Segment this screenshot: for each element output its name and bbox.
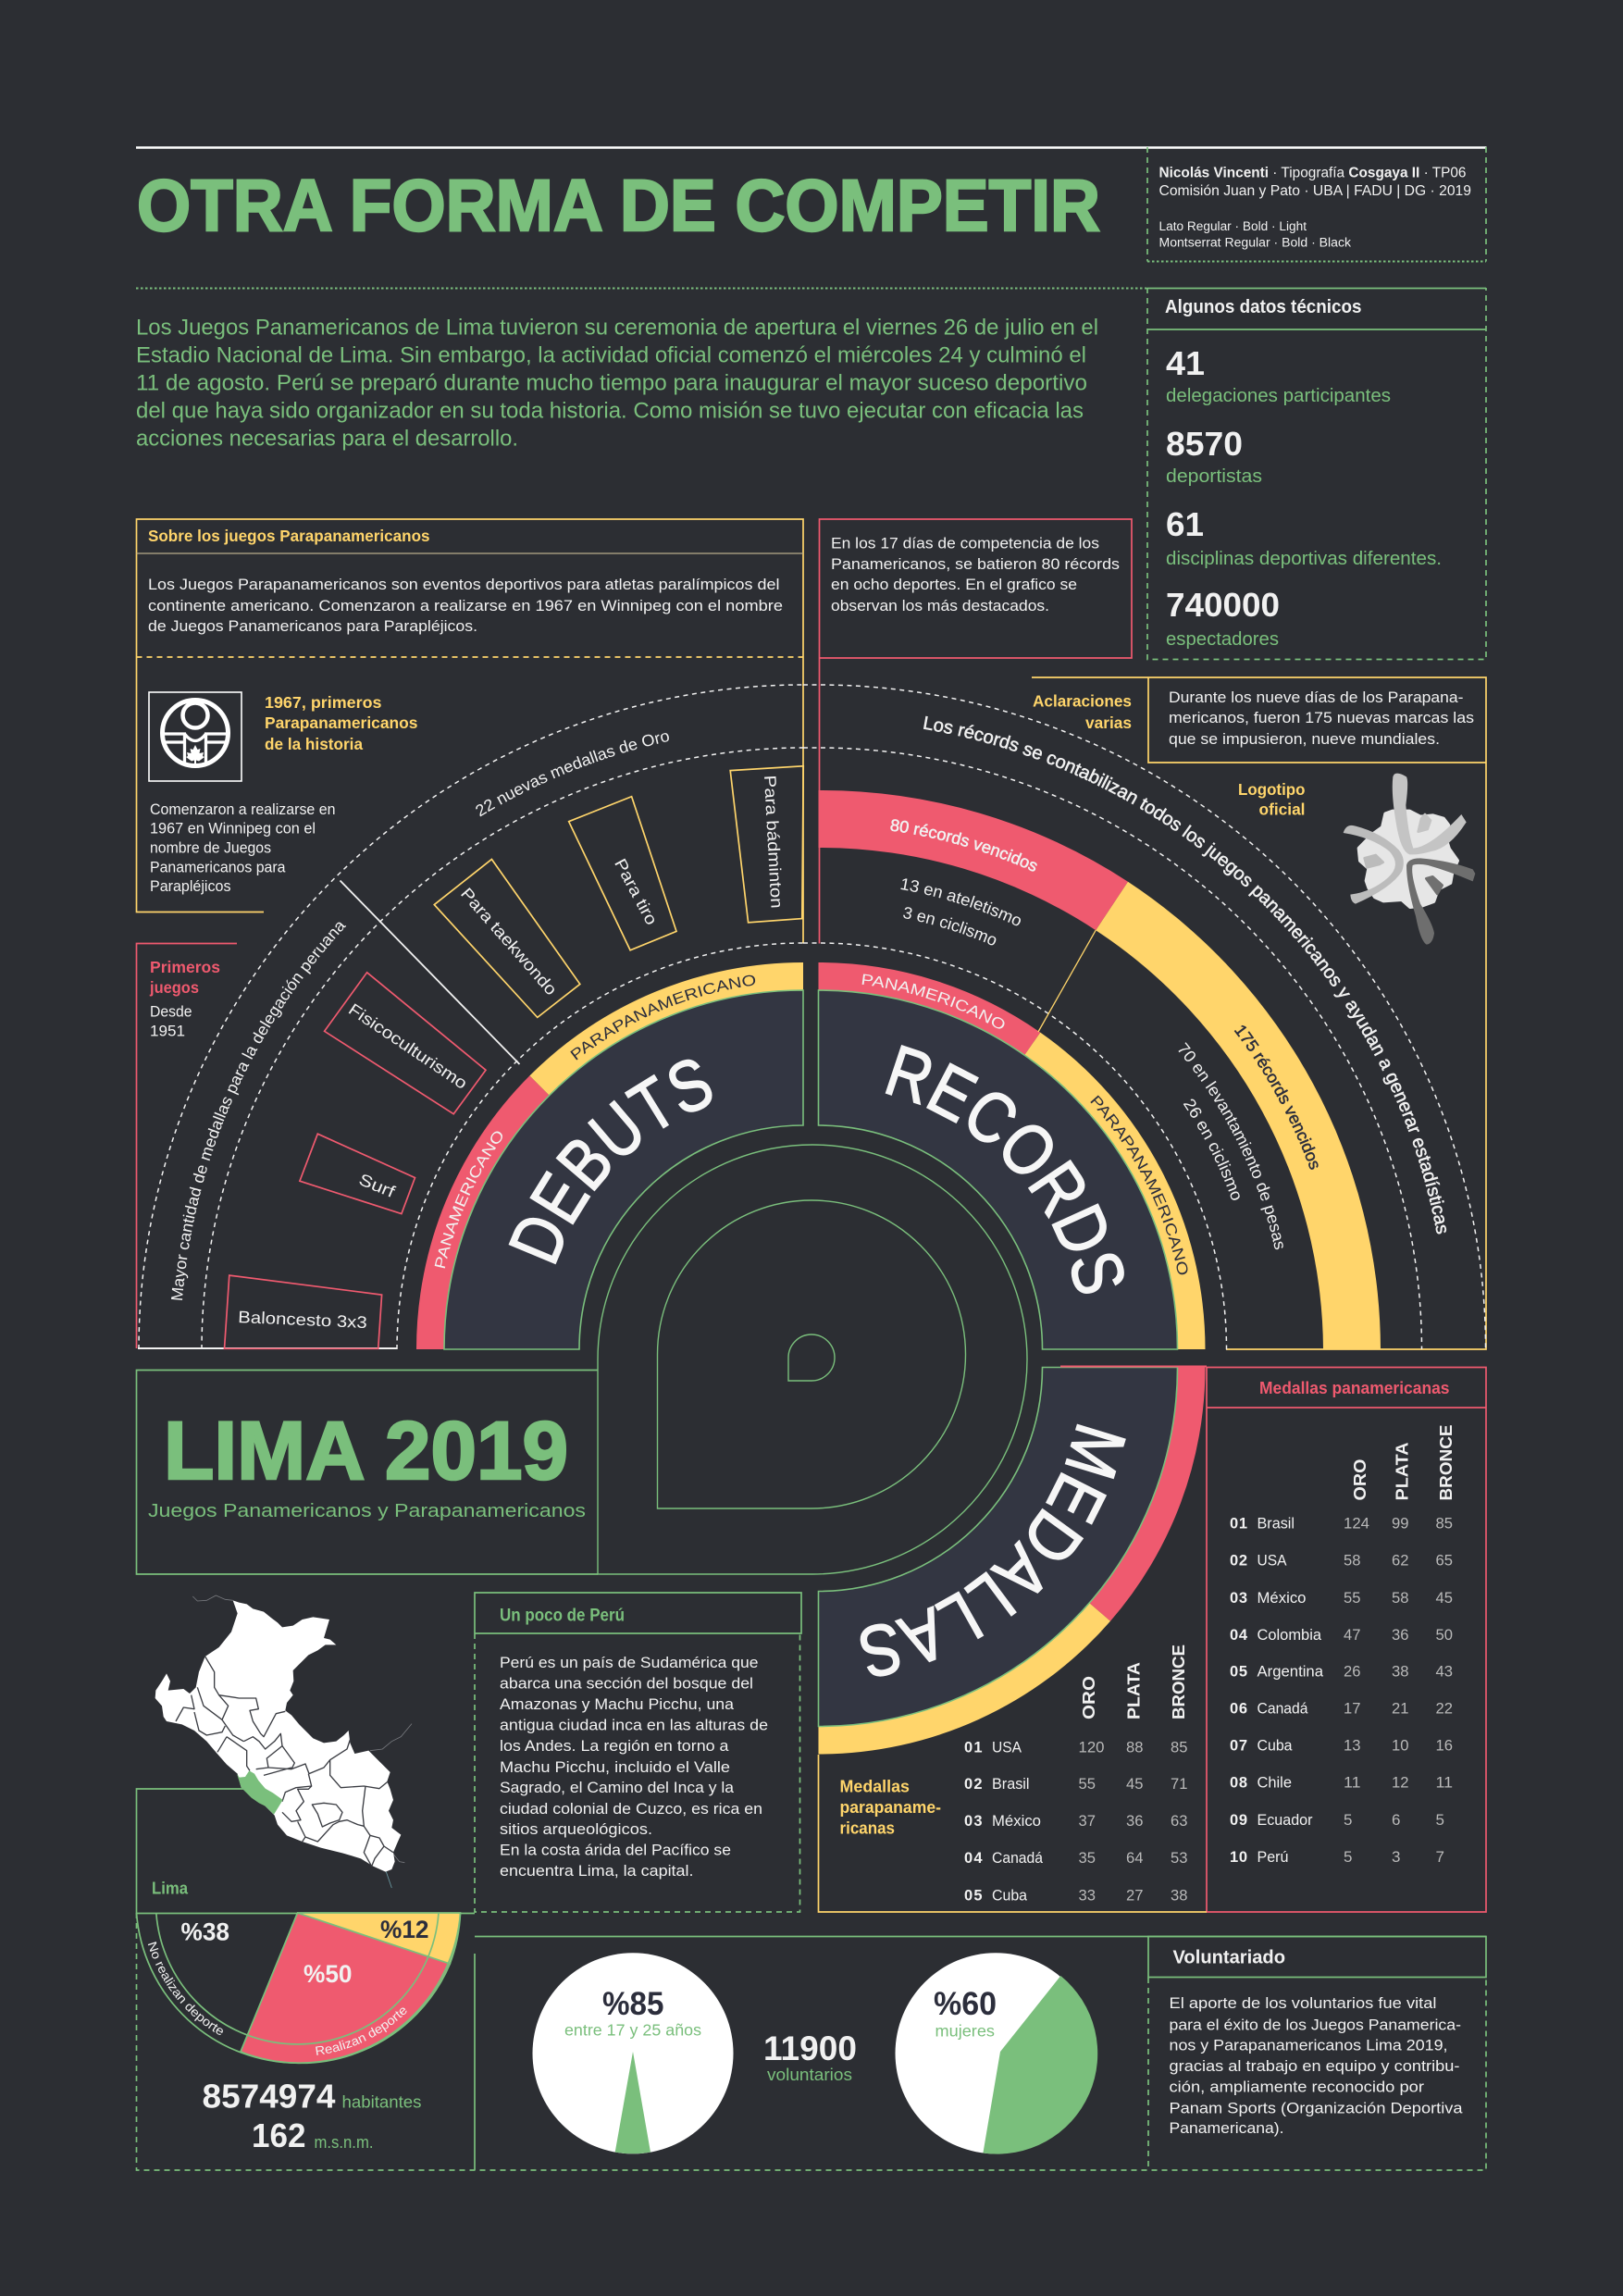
table rows: Chile <box>1257 1773 1292 1792</box>
table rows: 11 <box>1344 1773 1360 1792</box>
pie chart: 60%: mujeres <box>935 2021 995 2040</box>
text block: antigua ciudad inca en las alturas de <box>500 1716 768 1734</box>
chart: práctica deportiva <box>135 1912 461 2064</box>
stat: disciplinas: disciplinas deportivas diferentes. <box>1166 549 1442 569</box>
stat: delegaciones: delegaciones participantes <box>1166 386 1391 406</box>
table headers: PLATA <box>1394 1442 1412 1501</box>
text block: ción, ampliamente reconocido por <box>1170 2079 1424 2095</box>
table rows: 17 <box>1344 1699 1360 1718</box>
table rows: 03 <box>1230 1590 1247 1607</box>
table headers: ORO <box>1351 1458 1369 1501</box>
table rows: 62 <box>1392 1551 1408 1570</box>
text block: Machu Picchu, incluido el Valle <box>500 1758 730 1776</box>
text block: encuentra Lima, la capital. <box>500 1862 694 1880</box>
table rows <box>964 1738 1188 1905</box>
panel: primeros juegos <box>137 944 237 1348</box>
sport tag: fisicoculturismo <box>325 973 486 1114</box>
table rows: 02 <box>1230 1553 1247 1570</box>
sport tag: para tiro <box>569 797 676 950</box>
panel: aclaraciones varias: oficial <box>1258 800 1305 818</box>
table rows: 58 <box>1344 1551 1360 1570</box>
labels: detalle panamericano: 3 en ciclismo <box>903 907 996 946</box>
heading: Algunos datos técnicos <box>1165 297 1362 317</box>
table rows: 5 <box>1344 1811 1352 1829</box>
table rows: 36 <box>1126 1812 1144 1830</box>
panel: records intro: Panamericanos, se batieron 80 récords <box>831 555 1120 573</box>
heading: ricanas <box>840 1819 895 1838</box>
text block: comenzaron: nombre de Juegos <box>150 838 271 857</box>
sport tag: fisicoculturismo: Fisicoculturismo <box>345 999 471 1093</box>
heading <box>840 1777 941 1838</box>
panel: medallas panamericanas <box>1207 1368 1486 1912</box>
text block: gracias al trabajo en equipo y contribu- <box>1170 2057 1460 2075</box>
stat: deportistas: 8570 <box>1166 425 1243 463</box>
table rows: 01 <box>964 1740 983 1756</box>
table rows: 99 <box>1392 1514 1408 1533</box>
table rows: 47 <box>1344 1626 1360 1644</box>
chart: práctica deportiva: No realizan deporte <box>148 1942 223 2035</box>
table rows: 124 <box>1344 1514 1369 1533</box>
table rows: 09 <box>1230 1812 1247 1829</box>
panel: aclaraciones varias <box>1032 677 1486 1349</box>
heading: Medallas panamericanas <box>1259 1379 1449 1397</box>
table rows: 08 <box>1230 1775 1247 1792</box>
table rows: 55 <box>1344 1589 1360 1607</box>
table rows: Cuba <box>1257 1736 1293 1755</box>
panel: aclaraciones varias: mericanos, fueron 175 nuevas marcas las <box>1169 709 1474 726</box>
text block <box>148 576 783 635</box>
chart: práctica deportiva: %12 <box>380 1916 429 1943</box>
table rows: 58 <box>1392 1589 1408 1607</box>
panel: lima callout <box>137 1789 475 1914</box>
panel: datos técnicos <box>1147 288 1486 659</box>
stat: deportistas <box>1166 425 1262 487</box>
panel: primeros juegos: Primeros <box>150 958 220 976</box>
label: los récords se contabilizan: Los récords se contabilizan todos los juegos panamericanos y ayudan a generar estadísticas <box>923 716 1447 1235</box>
band: records vencidos: 175 récords vencidos <box>1234 1025 1319 1170</box>
heading: parapaname- <box>840 1798 941 1817</box>
table headers <box>1080 1644 1188 1719</box>
table rows: Brasil <box>992 1775 1029 1793</box>
text block: Los Juegos Parapanamericanos son eventos deportivos para atletas paralímpicos del <box>148 576 779 593</box>
table rows: 16 <box>1436 1736 1453 1755</box>
table rows: 5 <box>1344 1848 1352 1866</box>
intro text: del que haya sido organizador en su toda historia. Como misión se tuvo ejecutar con eficacia las <box>136 398 1084 424</box>
sport tag: surf <box>300 1134 415 1214</box>
quadrant: records: PARAPANAMERICANO <box>1090 1096 1188 1275</box>
table rows: Canadá <box>1257 1699 1308 1718</box>
sport tag: surf: Surf <box>356 1170 399 1201</box>
table rows: 36 <box>1392 1626 1408 1644</box>
band: records vencidos <box>818 790 1381 1349</box>
chart: práctica deportiva: %38 <box>181 1917 229 1945</box>
subheading: 1967 <box>265 693 418 753</box>
table rows: 7 <box>1436 1848 1444 1866</box>
subheading: 1967: 1967, primeros <box>265 693 382 712</box>
panel: aclaraciones varias: Aclaraciones <box>1033 692 1132 711</box>
table rows: USA <box>992 1738 1022 1756</box>
text block: ciudad colonial de Cuzco, es rica en <box>500 1800 762 1818</box>
table rows: 01 <box>1230 1516 1247 1533</box>
centre teardrop outlines <box>598 1145 1027 1574</box>
panel: aclaraciones varias: Logotipo <box>1238 780 1305 799</box>
stat: voluntarios: voluntarios <box>767 2066 852 2084</box>
dashed ring arcs <box>138 685 1486 1351</box>
sport tag: baloncesto 3x3 <box>224 1275 382 1348</box>
panel: sobre los juegos parapanamericanos <box>137 519 803 944</box>
heading: LIMA 2019 <box>164 1404 568 1496</box>
labels: detalle parapanamericano: 70 en levantamiento de pesas <box>1179 1042 1283 1249</box>
text block: continente americano. Comenzaron a realizarse en 1967 en Winnipeg con el nombre <box>148 597 783 614</box>
table rows <box>1230 1514 1453 1866</box>
sport tag: para tiro: Para tiro <box>611 855 661 928</box>
panel: colophon: Montserrat Regular · Bold · Black <box>1158 235 1351 250</box>
map highlight: Lima <box>237 1770 283 1815</box>
panel: primeros juegos: 1951 <box>150 1022 185 1040</box>
table headers: BRONCE <box>1170 1644 1188 1719</box>
panel: lima 2019 <box>137 1370 598 1574</box>
panel: lima callout: Lima <box>152 1879 189 1897</box>
table rows: 55 <box>1079 1775 1096 1793</box>
stat: delegaciones: 41 <box>1166 344 1205 382</box>
table rows: 45 <box>1126 1775 1144 1793</box>
panel: records intro: observan los más destacados. <box>831 597 1049 614</box>
quadrant: records <box>818 962 1205 1350</box>
stat: disciplinas <box>1166 505 1442 569</box>
table rows: 06 <box>1230 1701 1247 1718</box>
stats: habitantes y altura: m.s.n.m. <box>315 2133 374 2152</box>
stat: disciplinas: 61 <box>1166 505 1204 543</box>
table rows: 65 <box>1436 1551 1453 1570</box>
text block: abarca una sección del bosque del <box>500 1675 753 1692</box>
table rows: Brasil <box>1257 1514 1295 1533</box>
subheading: 1967: Parapanamericanos <box>265 714 418 732</box>
stat: espectadores: 740000 <box>1166 586 1280 624</box>
sport tag: para taekwondo: Para taekwondo <box>457 884 561 999</box>
panel: aclaraciones varias: Durante los nueve días de los Parapana- <box>1169 689 1464 706</box>
table rows: 5 <box>1436 1811 1444 1829</box>
sport tag: baloncesto 3x3: Baloncesto 3x3 <box>238 1308 367 1332</box>
heading: Voluntariado <box>1173 1947 1285 1967</box>
text block: para el éxito de los Juegos Panamerica- <box>1170 2016 1461 2034</box>
text block: Perú es un país de Sudamérica que <box>500 1654 759 1671</box>
label: 22 nuevas medallas: 22 nuevas medallas de Oro <box>476 733 669 816</box>
heading: Un poco de Perú <box>500 1607 625 1625</box>
stat: deportistas: deportistas <box>1166 466 1262 487</box>
title: OTRA FORMA DE COMPETIR <box>137 164 1100 246</box>
table rows: 26 <box>1344 1662 1360 1681</box>
stat: espectadores <box>1166 586 1280 650</box>
text block: El aporte de los voluntarios fue vital <box>1170 1994 1436 2012</box>
table rows: 38 <box>1392 1662 1408 1681</box>
chart: práctica deportiva: Realizan deporte <box>316 2008 407 2055</box>
quadrant: medallas <box>818 1366 1207 1755</box>
text block: comenzaron: 1967 en Winnipeg con el <box>150 820 316 837</box>
table rows: 05 <box>1230 1664 1247 1681</box>
frame: bottom row <box>137 1913 1486 2170</box>
table rows: 10 <box>1392 1736 1408 1755</box>
table rows: 38 <box>1171 1886 1188 1905</box>
table rows: 71 <box>1171 1775 1188 1793</box>
table rows: 6 <box>1392 1811 1400 1829</box>
table rows: 02 <box>964 1776 983 1793</box>
panel: aclaraciones varias: que se impusieron, nueve mundiales. <box>1169 730 1440 748</box>
stat: voluntarios: 11900 <box>763 2029 857 2067</box>
panel: colophon: Comisión Juan y Pato · UBA | FADU | DG · 2019 <box>1158 183 1471 199</box>
panel: colophon <box>1147 147 1486 261</box>
text block: sitios arqueológicos. <box>500 1820 652 1838</box>
table rows: Cuba <box>992 1886 1028 1905</box>
intro text <box>136 289 1147 452</box>
table rows: 35 <box>1079 1849 1096 1867</box>
table headers: PLATA <box>1125 1662 1144 1719</box>
table rows: 33 <box>1079 1886 1096 1905</box>
text block: nos y Parapanamericanos Lima 2019, <box>1170 2036 1447 2054</box>
table rows: 85 <box>1436 1514 1453 1533</box>
table rows: 10 <box>1230 1849 1247 1866</box>
stats: habitantes y altura: 8574974 <box>202 2077 335 2116</box>
panel: primeros juegos: juegos <box>149 978 199 997</box>
pie chart: 60% <box>896 1953 1097 2154</box>
table rows: 04 <box>1230 1627 1248 1644</box>
table rows: 12 <box>1392 1773 1408 1792</box>
table rows: 11 <box>1436 1773 1453 1792</box>
table rows: 05 <box>964 1888 983 1905</box>
text block: Panam Sports (Organización Deportiva <box>1170 2099 1463 2117</box>
quadrant: debuts <box>416 962 804 1350</box>
text block: de Juegos Panamericanos para Parapléjicos. <box>148 617 477 635</box>
table rows: 13 <box>1344 1736 1360 1755</box>
stats: habitantes y altura: habitantes <box>342 2093 422 2112</box>
panel: voluntariado <box>1148 1936 1486 2170</box>
labels: detalle parapanamericano: 26 en ciclismo <box>1183 1099 1240 1200</box>
quadrant: debuts: PANAMERICANO <box>435 1131 502 1268</box>
table rows: México <box>1257 1589 1307 1607</box>
intro text: acciones necesarias para el desarrollo. <box>136 426 518 452</box>
stats: habitantes y altura <box>202 2077 422 2154</box>
table rows: Colombia <box>1257 1626 1322 1644</box>
table rows: 85 <box>1171 1738 1188 1756</box>
table rows: USA <box>1257 1551 1287 1570</box>
table rows: 88 <box>1126 1738 1144 1756</box>
subheading: Juegos Panamericanos y Parapanamericanos <box>148 1501 586 1521</box>
table rows: 22 <box>1436 1699 1453 1718</box>
quadrant: records: PANAMERICANO <box>862 974 1005 1029</box>
quadrant: debuts: PARAPANAMERICANO <box>570 975 755 1061</box>
pie chart: 60%: %60 <box>934 1986 997 2022</box>
stat: voluntarios <box>763 2029 857 2084</box>
icon: logotipo oficial <box>1344 774 1475 945</box>
sport tag: para bádminton: Para bádminton <box>761 775 787 909</box>
table rows: 21 <box>1392 1699 1408 1718</box>
band: records vencidos: 80 récords vencidos <box>890 819 1037 872</box>
table headers: ORO <box>1080 1676 1098 1719</box>
pie chart: 85%: entre 17 y 25 años <box>564 2021 701 2040</box>
text block: comenzaron: Panamericanos para <box>150 859 286 875</box>
panel: colophon: Lato Regular · Bold · Light <box>1158 219 1307 233</box>
panel: records intro <box>820 519 1132 944</box>
panel: records intro: en ocho deportes. En el grafico se <box>831 576 1077 593</box>
table rows: 64 <box>1126 1849 1144 1867</box>
panel: medallas parapanamericanas <box>818 1644 1207 1912</box>
table rows: 27 <box>1126 1886 1144 1905</box>
table rows: 3 <box>1392 1848 1400 1866</box>
heading: Medallas <box>840 1777 910 1795</box>
intro text: Estadio Nacional de Lima. Sin embargo, la actividad oficial comenzó el miércoles 24 y culminó el <box>136 342 1086 368</box>
table rows: 07 <box>1230 1738 1247 1755</box>
sport tag: para taekwondo <box>434 859 580 1017</box>
stat: delegaciones <box>1166 344 1391 406</box>
text block <box>500 1654 768 1880</box>
panel: primeros juegos: Desde <box>150 1003 192 1020</box>
table rows: Ecuador <box>1257 1811 1313 1829</box>
text block: En la costa árida del Pacífico se <box>500 1842 731 1858</box>
stat: espectadores: espectadores <box>1166 629 1279 650</box>
icon: logo 1967 <box>149 692 242 781</box>
table rows: México <box>992 1812 1041 1830</box>
table rows: 63 <box>1171 1812 1188 1830</box>
text block: Sagrado, el Camino del Inca y la <box>500 1779 735 1796</box>
table rows: 53 <box>1171 1849 1188 1867</box>
panel: records intro: En los 17 días de competencia de los <box>831 535 1099 552</box>
table rows: 03 <box>964 1813 983 1830</box>
text block: los Andes. La región en torno a <box>500 1737 729 1755</box>
table rows: 50 <box>1436 1626 1453 1644</box>
text block: comenzaron <box>150 800 335 895</box>
stats: habitantes y altura: 162 <box>252 2116 305 2154</box>
table rows: Argentina <box>1257 1662 1324 1681</box>
panel: colophon: Nicolás Vincenti · Tipografía Cosgaya II · TP06 <box>1158 165 1466 181</box>
text block: comenzaron: Comenzaron a realizarse en <box>150 800 335 818</box>
table rows: 04 <box>964 1850 983 1867</box>
text block: Panamericana). <box>1170 2119 1284 2137</box>
intro text: Los Juegos Panamericanos de Lima tuvieron su ceremonia de apertura el viernes 26 de julio en el <box>136 315 1098 341</box>
table rows: Perú <box>1257 1848 1288 1866</box>
chart: práctica deportiva: %50 <box>304 1960 352 1988</box>
quadrant: medallas: MEDALLAS <box>861 1423 1126 1677</box>
panel: un poco de perú <box>475 1593 801 1912</box>
table rows: 120 <box>1079 1738 1105 1756</box>
sport tag: para bádminton <box>730 766 803 923</box>
pie chart: 85%: %85 <box>602 1986 664 2022</box>
subheading: 1967: de la historia <box>265 735 363 753</box>
pie chart: 85% <box>533 1953 733 2153</box>
table rows: 37 <box>1079 1812 1096 1830</box>
panel: aclaraciones varias: varias <box>1085 714 1132 732</box>
text block: comenzaron: Parapléjicos <box>150 877 231 895</box>
table rows: 45 <box>1436 1589 1453 1607</box>
quadrant: debuts: DEBUTS <box>509 1059 712 1264</box>
label: mayor cantidad de medallas: Mayor cantidad de medallas para la delegación peruana <box>171 922 346 1300</box>
quadrant: records: RECORDS <box>885 1045 1124 1294</box>
table headers <box>1351 1425 1456 1501</box>
table headers: BRONCE <box>1437 1425 1456 1501</box>
text block: Amazonas y Machu Picchu, una <box>500 1695 735 1713</box>
intro text: 11 de agosto. Perú se preparó durante mucho tiempo para inaugurar el mayor suceso deportivo <box>136 370 1087 396</box>
table rows: Canadá <box>992 1849 1043 1867</box>
heading: Sobre los juegos Parapanamericanos <box>148 527 430 545</box>
labels: detalle panamericano: 13 en ateletismo <box>900 878 1021 925</box>
map: Perú <box>155 1595 412 1888</box>
text block <box>1170 1994 1463 2137</box>
table rows: 43 <box>1436 1662 1453 1681</box>
